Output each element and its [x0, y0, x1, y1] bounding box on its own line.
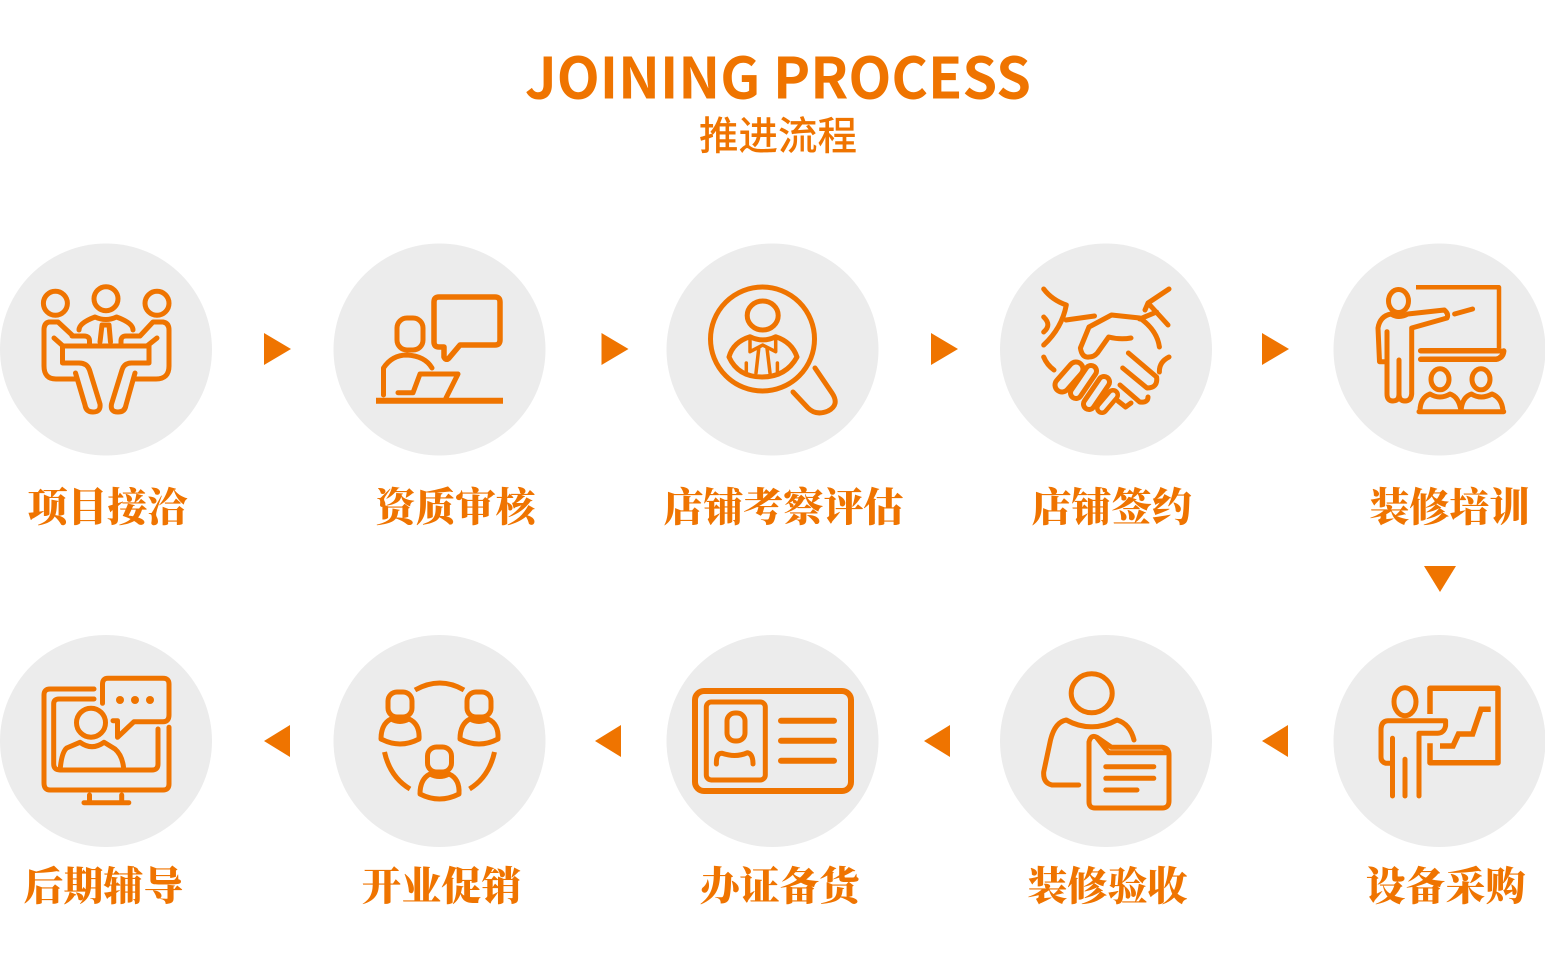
icon: presenter with chart [1381, 688, 1498, 796]
title: JOINING PROCESS [525, 34, 1031, 116]
step 5 label: 装修培训 [1370, 485, 1530, 530]
arrow [595, 725, 621, 757]
step 4: store signing [1000, 244, 1212, 456]
step 8: licences and stock [666, 635, 878, 847]
icon: person with laptop and speech bubble [376, 297, 503, 401]
arrow [1262, 333, 1289, 365]
arrow [264, 725, 290, 757]
icon: meeting [43, 287, 169, 412]
arrow [924, 725, 950, 757]
arrow down [1424, 566, 1456, 592]
step 2: qualification review [334, 244, 546, 456]
icon: magnifier over person [710, 287, 835, 413]
step 3: store inspection [666, 244, 878, 456]
arrow [264, 333, 291, 365]
step 7 label: 装修验收 [1028, 864, 1188, 909]
step 8 label: 办证备货 [700, 864, 864, 909]
arrow [1262, 725, 1288, 757]
step 3 label: 店铺考察评估 [664, 485, 904, 530]
step 6 label: 设备采购 [1366, 864, 1526, 909]
step 1 label: 项目接洽 [28, 485, 188, 530]
arrow [602, 333, 628, 365]
step 6: equipment purchase [1334, 635, 1545, 847]
step 9 label: 开业促销 [362, 864, 522, 909]
arrow [931, 333, 958, 365]
step 1: project negotiation [0, 244, 212, 456]
step 4 label: 店铺签约 [1032, 485, 1192, 530]
step 7: decoration acceptance [1000, 635, 1212, 847]
step 2 label: 资质审核 [376, 485, 539, 530]
step 10: follow-up coaching [0, 635, 212, 847]
dots [116, 696, 154, 704]
icon: person with folder [1044, 674, 1169, 808]
icon: id card [695, 691, 851, 791]
knuckles [1062, 369, 1113, 408]
step 10 label: 后期辅导 [24, 864, 184, 909]
step 5: decoration training [1334, 244, 1545, 456]
icon: handshake [1044, 289, 1169, 408]
icon: three people in a circle [381, 683, 498, 799]
icon: trainer with students [1378, 287, 1504, 412]
icon: monitor with video call [44, 678, 169, 803]
subtitle: 推进流程 [699, 115, 857, 159]
step 9: opening promotion [334, 635, 546, 847]
